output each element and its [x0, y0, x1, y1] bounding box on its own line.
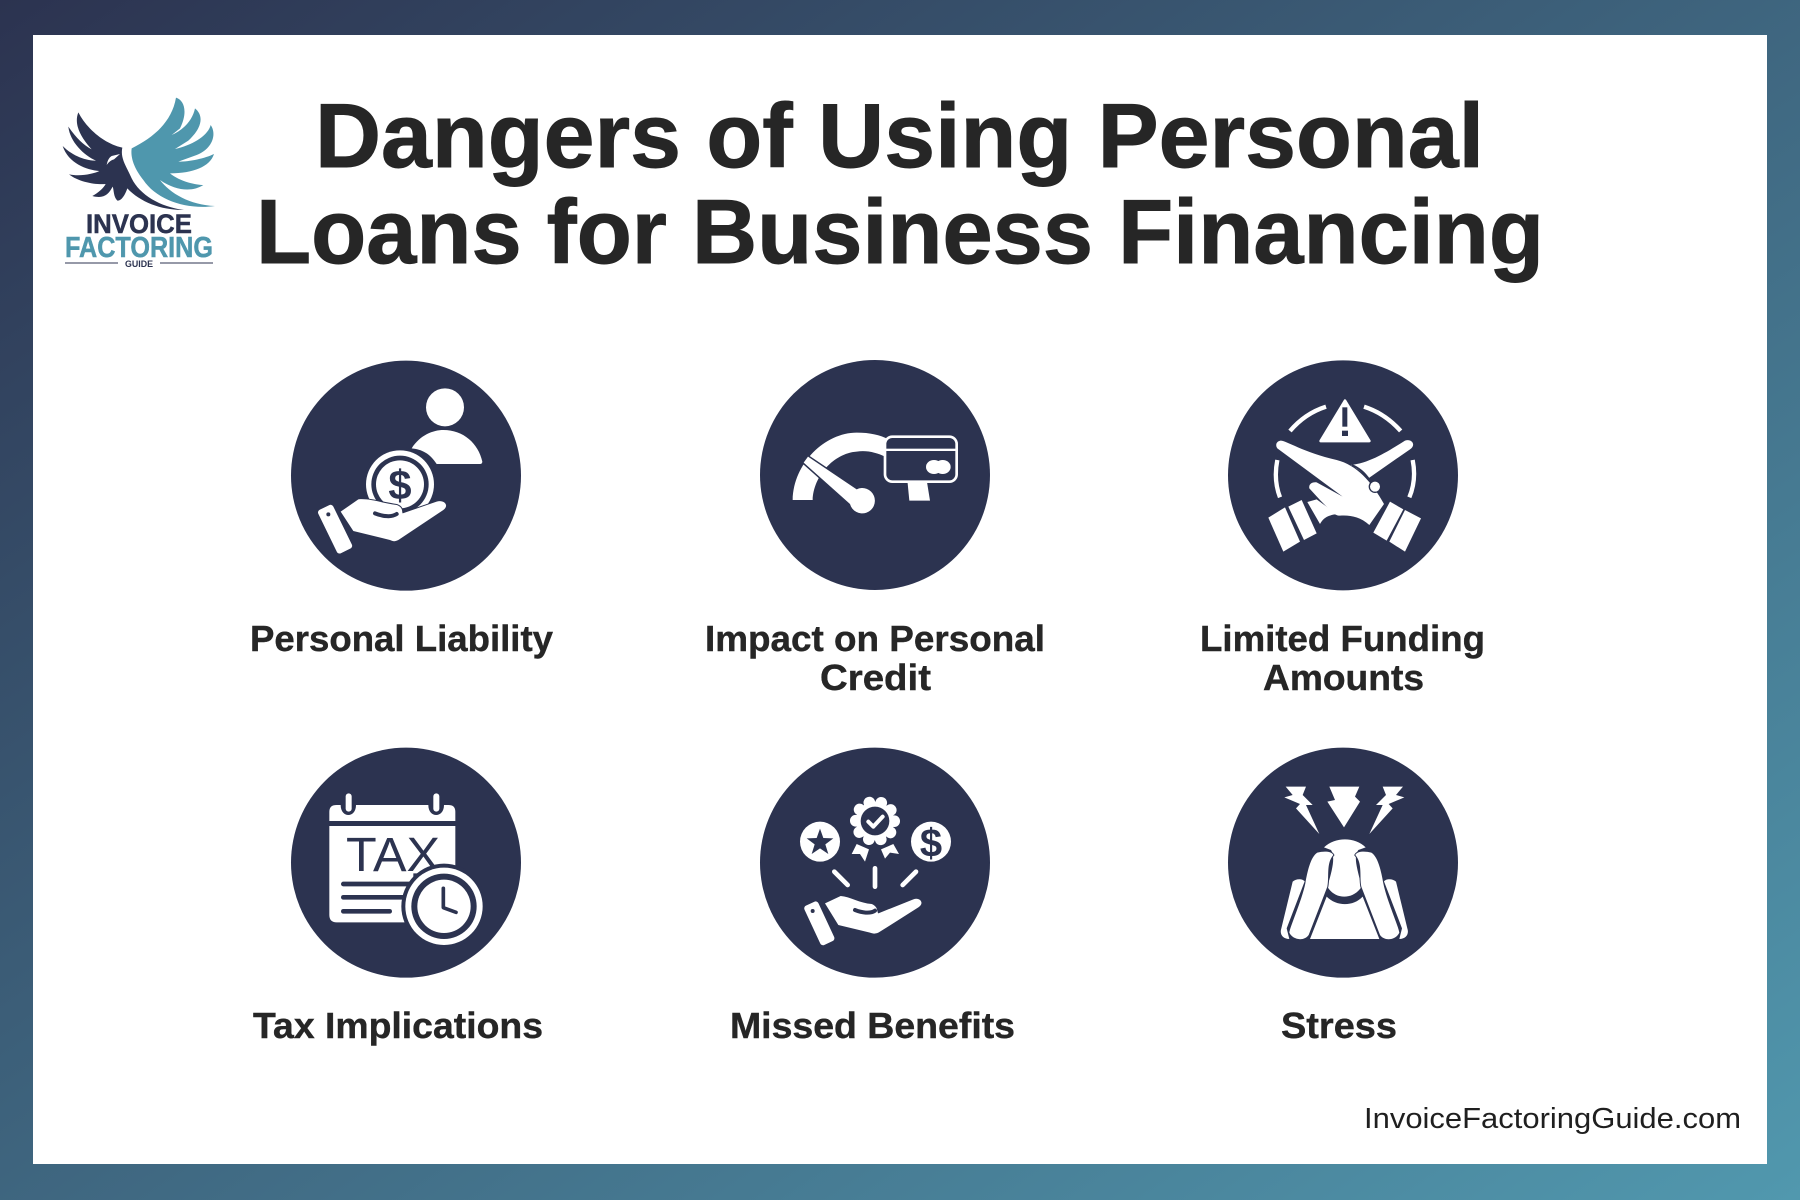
icon: head in hands with lightning bolts [1228, 748, 1458, 978]
panel: Impact on Personal Credit [705, 360, 1045, 698]
label: Tax Implications: Tax Implications [253, 1005, 543, 1046]
icon: tax calendar with clock [291, 748, 521, 978]
label line 1: Impact on Personal [705, 618, 1045, 659]
website credit: InvoiceFactoringGuide.com [1364, 1103, 1741, 1135]
logo word: GUIDE: GUIDE [125, 259, 153, 269]
panel: Limited Funding Amounts [1200, 360, 1485, 698]
icon: hand holding coin with person [291, 361, 521, 591]
icon: credit gauge with card [760, 360, 990, 590]
logo: Invoice Factoring Guide [63, 98, 215, 269]
label: Missed Benefits: Missed Benefits [730, 1005, 1015, 1046]
title line 2: Loans for Business Financing [256, 182, 1544, 283]
icon: crossed hands with warning [1228, 360, 1458, 590]
label: Impact on Personal Credit [705, 618, 1045, 698]
label: Limited Funding Amounts [1200, 618, 1485, 698]
icon: tax calendar with clock: TAX [346, 828, 440, 882]
title line 1: Dangers of Using Personal [315, 86, 1484, 187]
icon: hand with badge, star and dollar: $ [920, 822, 942, 866]
panel: Missed Benefits [730, 748, 1015, 1046]
logo eagle mark [63, 98, 215, 210]
title [256, 86, 1544, 283]
label line 2: Credit [820, 657, 931, 698]
panel: Stress [1228, 748, 1458, 1046]
icon: hand holding coin with person: $ [388, 461, 412, 508]
panel: Tax Implications [253, 748, 543, 1046]
label line 1: Limited Funding [1200, 618, 1485, 659]
logo word: INVOICE: INVOICE [86, 209, 192, 239]
logo word: FACTORING: FACTORING [65, 232, 213, 264]
label: Personal Liability: Personal Liability [250, 618, 553, 659]
label line 2: Amounts [1263, 657, 1424, 698]
icon: hand with badge, star and dollar [760, 748, 990, 978]
label: Stress: Stress [1281, 1005, 1397, 1046]
panel: Personal Liability [250, 361, 553, 659]
